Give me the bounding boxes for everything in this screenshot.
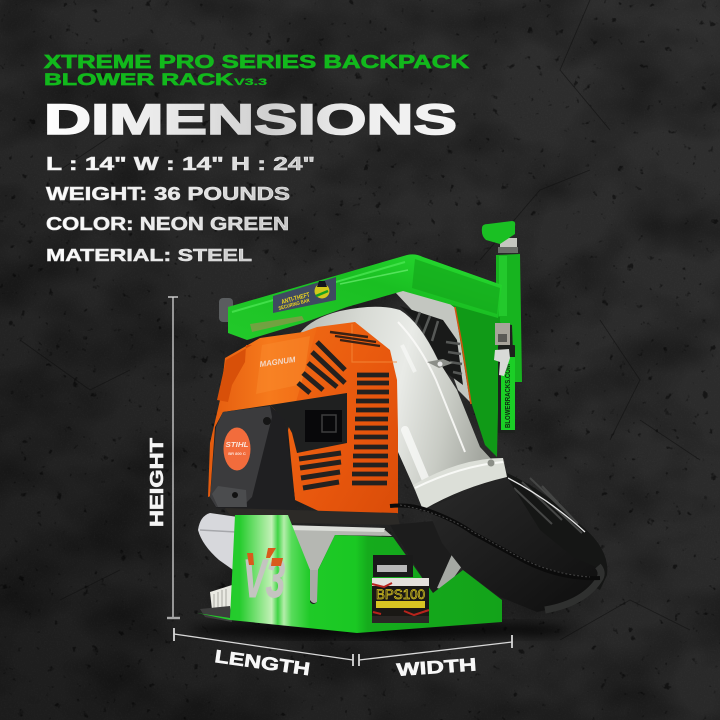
black cable	[390, 506, 600, 578]
lock handle	[482, 221, 515, 244]
white tank left	[198, 513, 238, 572]
engine base under housing	[225, 508, 400, 525]
orange strip	[455, 307, 471, 404]
engine rear dark fins	[400, 306, 463, 385]
heading: product name: BLOWER RACK	[44, 70, 234, 89]
blower tube: silver elbow	[300, 307, 505, 490]
tube clamp bolt	[427, 359, 453, 368]
keychain strap	[498, 345, 515, 433]
brand label on cover: MAGNUM	[259, 355, 296, 369]
stihl badge	[224, 428, 250, 470]
hose ribbed	[507, 473, 607, 590]
spec list	[46, 154, 315, 265]
black throttle handle	[270, 393, 347, 453]
spec: color: COLOR: NEON GREEN	[46, 214, 289, 234]
dark base pad	[200, 606, 232, 622]
sticker: anti-theft securing bar: SECURING BAR	[278, 298, 311, 312]
lower vents	[299, 453, 341, 488]
rack: top frame	[228, 254, 502, 340]
label: length: LENGTH	[213, 646, 311, 679]
v3 cut-out logo	[243, 548, 285, 609]
keychain strap: BLOWERRACKS.COM	[505, 364, 512, 428]
keys and lock	[494, 323, 510, 376]
sticker: anti-theft securing bar: ANTI-THEFT	[281, 292, 311, 306]
dimension line: width	[359, 635, 512, 666]
dimension line: length	[174, 628, 353, 666]
engine left orange cover	[208, 327, 330, 497]
bps100 plate: BPS100	[376, 587, 425, 602]
stihl badge: STIHL	[226, 440, 249, 449]
spec: size: L : 14" W : 14" H : 24"	[46, 154, 315, 174]
silver tab in notch	[309, 570, 319, 603]
lock post	[482, 221, 522, 382]
heading: dimensions: DIMENSIONS	[44, 96, 457, 144]
sticker: anti-theft securing bar	[273, 277, 336, 313]
tube collar	[413, 458, 507, 510]
product: backpack blower on rack	[190, 221, 607, 639]
data plate	[373, 555, 413, 577]
rack: underside glimpse	[250, 316, 304, 332]
black nozzle	[427, 477, 603, 612]
dark engine interior	[390, 520, 460, 595]
v3 cut-out logo: V3	[243, 549, 285, 609]
shadow under product	[190, 621, 570, 639]
rack: rear green side plate	[440, 303, 500, 457]
spec: weight: WEIGHT: 36 POUNDS	[46, 184, 290, 204]
dimension line: height	[167, 297, 180, 618]
silver inner plate	[285, 525, 392, 570]
top vents	[330, 332, 380, 346]
heading: product name	[44, 51, 470, 89]
stihl badge: BR 800 C	[228, 451, 246, 456]
rack: base plate	[197, 515, 502, 633]
silver shroud behind tube	[395, 285, 470, 402]
rack: rear handle stub	[219, 298, 233, 322]
dark starter housing	[210, 405, 297, 512]
heading: product name: XTREME PRO SERIES BACKPACK	[44, 51, 470, 72]
diagonal vents	[298, 342, 345, 393]
white brush pad	[210, 585, 232, 612]
label: height: HEIGHT	[147, 438, 167, 527]
bps100 plate	[372, 578, 429, 623]
label: width: WIDTH	[396, 654, 477, 680]
side vents	[352, 375, 389, 483]
engine main orange vented cover	[288, 322, 398, 517]
spec: material: MATERIAL: STEEL	[46, 245, 252, 265]
heading: product name: V3.3	[234, 77, 267, 88]
